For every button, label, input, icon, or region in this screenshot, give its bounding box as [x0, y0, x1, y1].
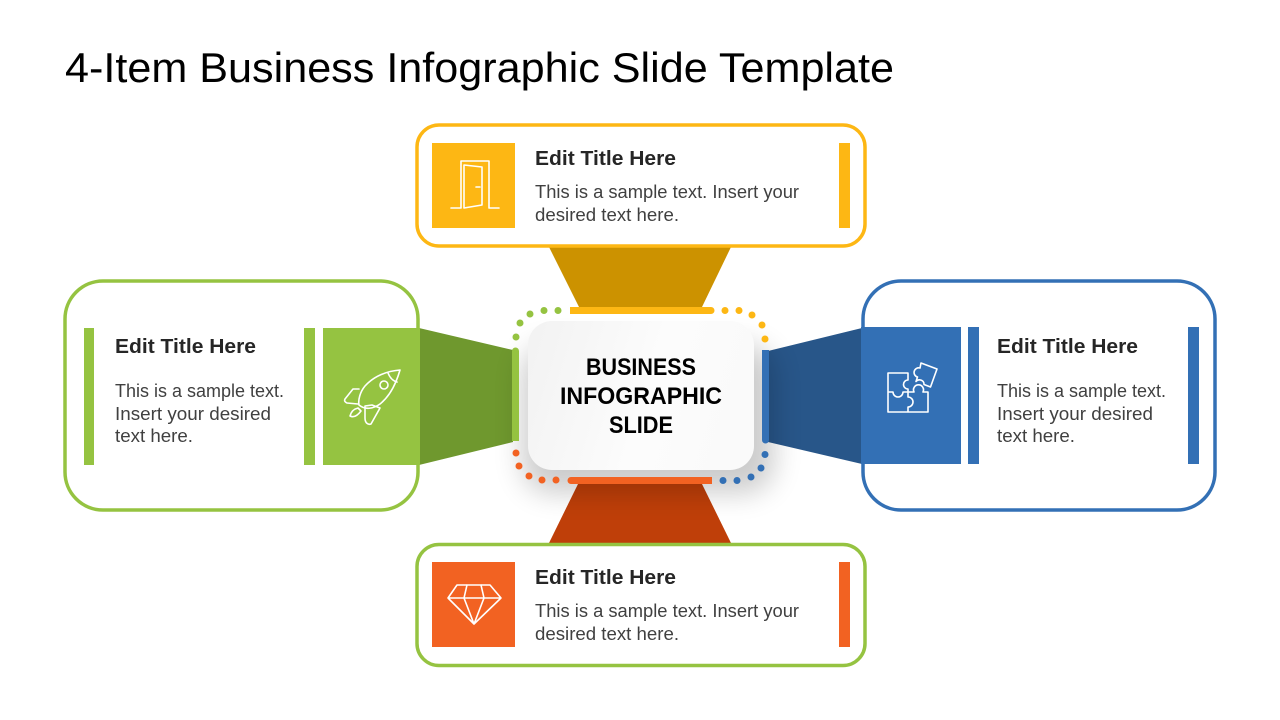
hub bar: left — [512, 348, 519, 441]
dots: green — [512, 307, 562, 340]
left card text: Insert your desired — [115, 404, 271, 424]
left card heading: Edit Title Here — [115, 336, 256, 358]
left card text: This is a sample text. — [115, 381, 284, 401]
connector: bottom trapezoid — [549, 484, 731, 543]
panel: bottom card — [417, 544, 865, 666]
right card divider bar — [968, 327, 979, 464]
top card text: desired text here. — [535, 205, 679, 225]
bottom card text: desired text here. — [535, 624, 679, 644]
top card text: This is a sample text. Insert your — [535, 182, 799, 202]
bottom card text: This is a sample text. Insert your — [535, 601, 799, 621]
icon: rocket — [323, 328, 420, 465]
hub label: SLIDE — [609, 412, 673, 439]
bottom card heading: Edit Title Here — [535, 567, 676, 589]
top card accent bar — [839, 143, 850, 228]
hub bar: top — [570, 307, 715, 314]
right card heading: Edit Title Here — [997, 336, 1138, 358]
dots: orange — [512, 450, 560, 484]
dots: yellow — [722, 307, 768, 342]
right card text: Insert your desired — [997, 404, 1153, 424]
hub label: BUSINESS — [586, 354, 696, 381]
icon: puzzle — [861, 327, 961, 464]
hub shadow — [522, 345, 774, 493]
left card divider bar — [304, 328, 315, 465]
hub card — [528, 321, 754, 470]
connector: left trapezoid — [419, 328, 513, 465]
panel: right card — [861, 281, 1215, 510]
right card text: This is a sample text. — [997, 381, 1166, 401]
hub bar: bottom — [568, 477, 712, 484]
panel: top card — [417, 125, 865, 246]
right card text: text here. — [997, 426, 1075, 446]
panel: left card — [65, 281, 420, 510]
hub bar: right — [762, 350, 769, 444]
left card accent bar — [84, 328, 94, 465]
top card heading: Edit Title Here — [535, 148, 676, 170]
bottom card accent bar — [839, 562, 850, 647]
hub label: INFOGRAPHIC — [560, 383, 722, 410]
title: 4-Item Business Infographic Slide Template — [65, 44, 894, 91]
icon: door — [432, 143, 515, 228]
right card accent bar — [1188, 327, 1199, 464]
connector: right trapezoid — [768, 328, 862, 464]
center hub — [512, 307, 774, 493]
dots: blue — [720, 451, 768, 484]
icon: diamond — [432, 562, 515, 647]
connector: top trapezoid — [549, 247, 731, 307]
left card text: text here. — [115, 426, 193, 446]
